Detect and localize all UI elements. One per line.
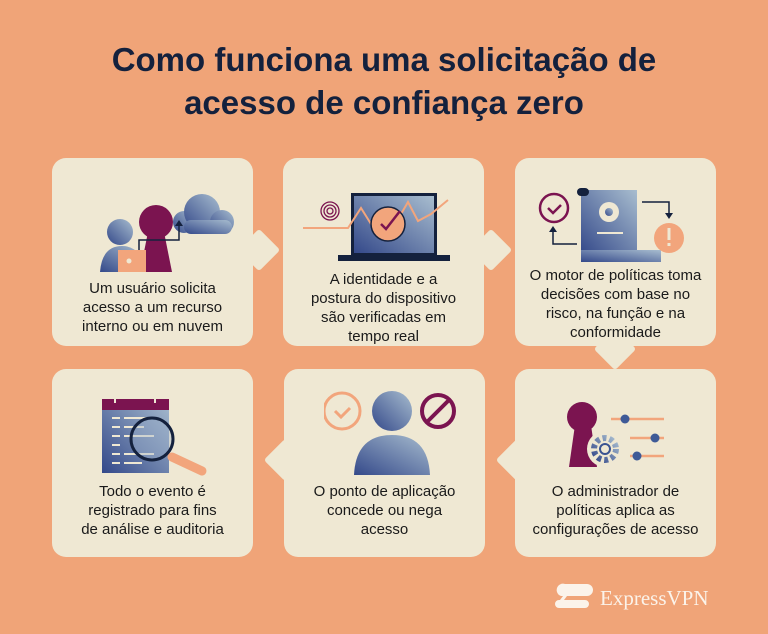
notch: card3 to card6 (594, 328, 636, 370)
icon: policy scroll (538, 188, 684, 262)
text: step 3: O motor de políticas toma (530, 267, 701, 284)
text: step 6: políticas aplica as (556, 502, 675, 518)
icon: keyhole with gear and sliders (567, 402, 664, 467)
text: step 2: tempo real (348, 328, 419, 345)
icon: laptop with fingerprint and clock (303, 193, 450, 261)
icon: person allow deny (324, 391, 456, 475)
text: step 5: acesso (361, 520, 408, 538)
panel: step 1 (52, 158, 253, 346)
text: step 5: concede ou nega (327, 502, 442, 518)
title: Como funciona uma solicitação de (112, 41, 656, 78)
panel: step 4 (52, 369, 253, 557)
notch: card6 to card5 (496, 439, 538, 481)
text: step 6: configurações de acesso (533, 520, 698, 538)
text: step 3: decisões com base no (541, 286, 690, 303)
text: step 1: Um usuário solicita (89, 280, 216, 296)
notch: card5 to card4 (264, 439, 306, 481)
text: step 6 (533, 482, 698, 538)
text: step 2: A identidade e a (330, 271, 437, 288)
text: step 3 (530, 267, 702, 341)
text: step 3: risco, na função e na (546, 305, 685, 322)
text: step 3: conformidade (570, 324, 661, 341)
logo: ExpressVPN: ExpressVPN (600, 586, 708, 610)
panel: step 3 (515, 158, 716, 346)
panel: step 2 (283, 158, 484, 346)
panel: step 5 (284, 369, 485, 557)
notch: card1 to card2 (238, 229, 280, 271)
title (112, 41, 656, 121)
text: step 2: são verificadas em (321, 309, 446, 326)
panel: step 6 (515, 369, 716, 557)
text: step 5: O ponto de aplicação (314, 482, 455, 500)
text: step 1 (82, 280, 223, 334)
text: step 2: postura do dispositivo (311, 290, 456, 307)
text: step 4: Todo o evento é (99, 482, 206, 500)
text: step 1: acesso a um recurso (83, 298, 222, 316)
notch: card2 to card3 (470, 229, 512, 271)
text: step 5 (314, 482, 455, 538)
title: acesso de confiança zero (184, 84, 584, 121)
text: step 2 (311, 271, 456, 345)
text: step 4 (81, 482, 224, 538)
icon: calendar log with magnifier (102, 399, 206, 476)
text: step 6: O administrador de (552, 482, 679, 500)
icon: user keyhole cloud (100, 194, 234, 272)
text: step 1: interno ou em nuvem (82, 318, 223, 334)
text: step 4: registrado para fins (88, 502, 217, 518)
logo: ExpressVPN (555, 584, 708, 610)
text: step 4: de análise e auditoria (81, 520, 224, 538)
